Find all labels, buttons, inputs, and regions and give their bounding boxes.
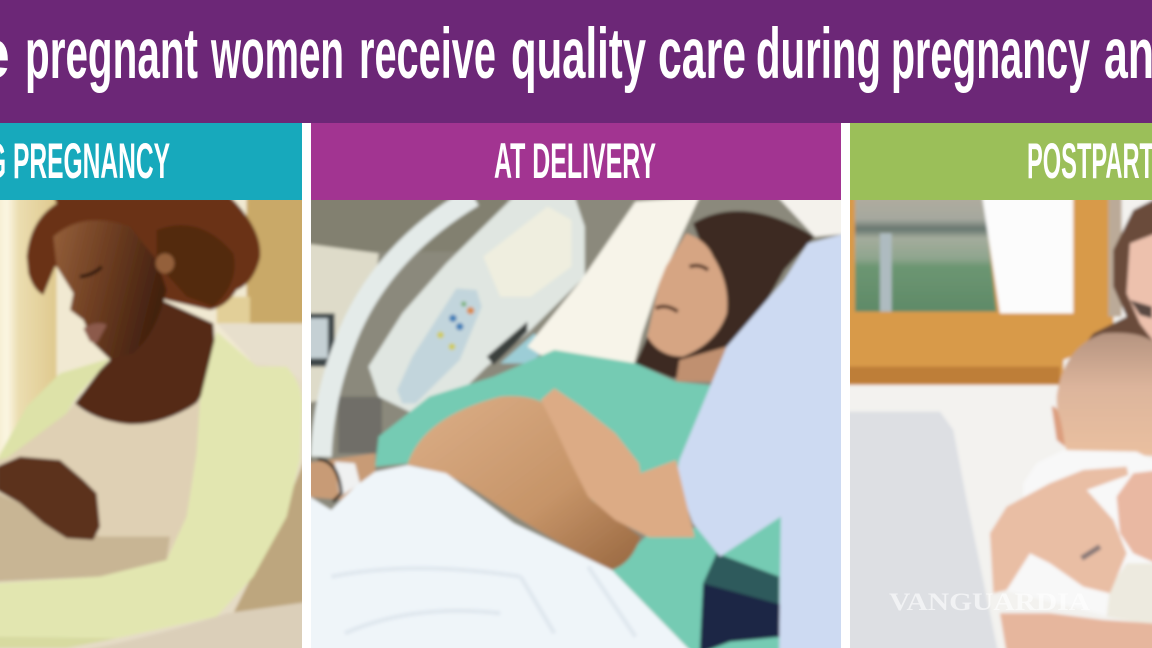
- title text: [0, 15, 1152, 94]
- lower hand: [1000, 613, 1152, 648]
- neck: [676, 347, 727, 382]
- bed sheet: [304, 465, 693, 648]
- hair: [1088, 200, 1152, 343]
- face: [53, 220, 167, 359]
- hair: [27, 197, 260, 310]
- face: [1127, 232, 1152, 350]
- title text: during: [756, 15, 881, 94]
- title text: pregnant: [25, 15, 198, 94]
- mother's hand: [990, 467, 1128, 593]
- clinician arm and hand: [541, 388, 695, 537]
- cardigan right and sleeve: [0, 332, 302, 638]
- top: [0, 402, 200, 554]
- panel: during pregnancy: [0, 123, 310, 648]
- ear: [156, 253, 174, 273]
- belt: [700, 583, 783, 648]
- clinician: [676, 232, 852, 648]
- panel: at delivery: [304, 123, 852, 648]
- heading: at delivery: [311, 123, 841, 200]
- belly: [407, 396, 641, 570]
- facial features: [656, 266, 708, 312]
- title banner: [0, 0, 1152, 123]
- pillow: [527, 197, 700, 365]
- bed panel: [368, 197, 585, 413]
- photo: woman in labour with clinician: [304, 193, 852, 648]
- photo: pregnant woman resting: [0, 193, 310, 648]
- title text: care: [658, 15, 746, 94]
- cardigan left: [0, 358, 110, 460]
- baby head: [1057, 333, 1152, 457]
- title text: women: [210, 15, 344, 94]
- title text: quality: [511, 15, 646, 94]
- bed rail: [321, 197, 473, 457]
- patient arm and wristband: [304, 453, 375, 500]
- window frame: [843, 193, 1113, 385]
- hair: [635, 211, 815, 378]
- face: [647, 233, 727, 357]
- baby arm: [1117, 470, 1152, 565]
- photo: mother holding baby: [843, 193, 1152, 648]
- watermark: VANGUARDIA: [889, 589, 1090, 616]
- heading: at delivery: AT DELIVERY: [494, 133, 656, 189]
- belly shading: [0, 493, 170, 582]
- baby clothes: [1003, 450, 1152, 623]
- monitor: [304, 243, 379, 403]
- heading: during pregnancy: [0, 123, 302, 200]
- lips: [83, 323, 107, 343]
- gown: [375, 350, 784, 648]
- eye: [80, 267, 102, 277]
- knit blanket: [1107, 563, 1152, 627]
- heading: postpartum: [850, 123, 1152, 200]
- neck and chest: [75, 293, 217, 424]
- control keypad: [397, 288, 482, 403]
- gown fold shadow: [703, 553, 779, 605]
- title text: receive: [359, 15, 496, 94]
- laptop: [843, 412, 998, 648]
- panel: postpartum: [843, 123, 1152, 648]
- window view: [855, 193, 997, 312]
- hand on belly: [0, 457, 100, 540]
